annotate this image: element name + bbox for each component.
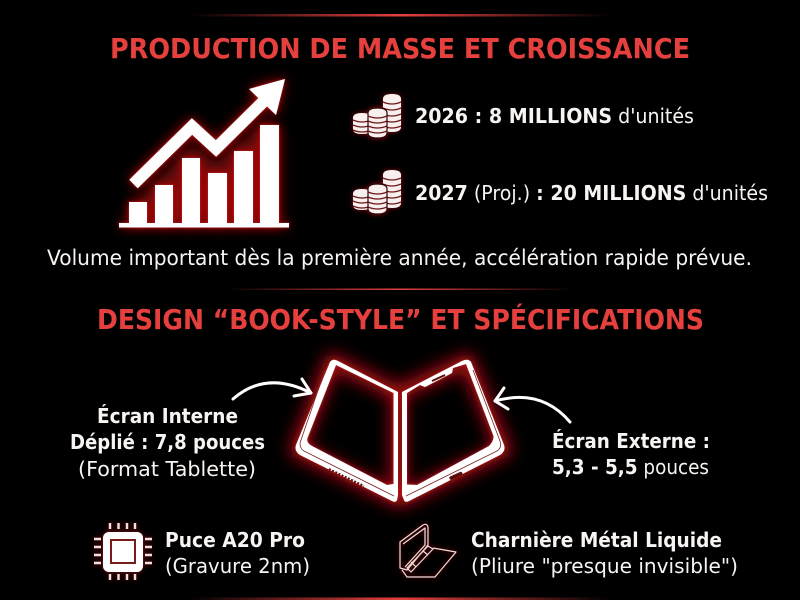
label: internal screen: Déplié : 7,8 pouces — [70, 430, 265, 454]
top divider — [190, 14, 610, 16]
label: internal screen — [70, 404, 265, 481]
icon: hinge — [400, 524, 456, 577]
port — [449, 471, 463, 480]
middle divider — [225, 288, 575, 290]
label: external screen: 5,3 - 5,5 pouces — [552, 455, 709, 479]
arrow: external screen — [495, 388, 570, 422]
icon: growth chart — [119, 79, 289, 228]
notch grille — [432, 375, 445, 381]
stat: 2027: 2027 (Proj.) : 20 MILLIONS d'unités — [415, 181, 768, 205]
right panel — [402, 360, 504, 502]
label: internal screen: (Format Tablette) — [78, 457, 256, 481]
left panel — [296, 360, 398, 502]
phone glow — [297, 361, 504, 500]
icon: foldable phone — [296, 360, 504, 502]
text: hinge: Charnière Métal Liquide — [471, 528, 722, 552]
label: internal screen: Écran Interne — [97, 404, 238, 428]
speaker dots — [329, 469, 364, 486]
icon: coins 2026 — [353, 94, 401, 138]
text: chip — [165, 528, 310, 578]
arrow: internal screen — [233, 379, 311, 399]
title: design: DESIGN “BOOK-STYLE” ET SPÉCIFICATIONS — [97, 302, 704, 336]
frame seams — [300, 370, 501, 496]
summary sentence: Volume important dès la première année, accélération rapide prévue. — [47, 246, 752, 270]
icon: chip — [94, 523, 152, 580]
text: chip: (Gravure 2nm) — [165, 554, 310, 578]
text: hinge — [471, 528, 738, 578]
bottom divider — [190, 598, 610, 600]
text: hinge: (Pliure "presque invisible") — [471, 554, 738, 578]
text: chip: Puce A20 Pro — [165, 528, 305, 552]
label: external screen — [552, 429, 710, 479]
label: external screen: Écran Externe : — [552, 429, 710, 453]
icon: coins 2027 — [353, 170, 401, 214]
title: production: PRODUCTION DE MASSE ET CROISSANCE — [110, 32, 690, 65]
stat: 2026: 2026 : 8 MILLIONS d'unités — [415, 104, 694, 128]
